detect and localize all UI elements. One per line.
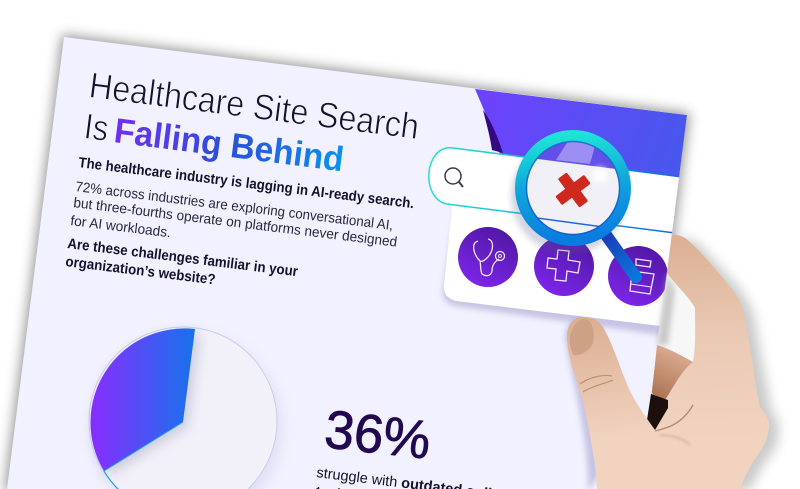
palm crease bbox=[655, 405, 693, 431]
title: Falling Behind bbox=[112, 111, 346, 179]
title bbox=[82, 64, 422, 179]
red X mark bbox=[554, 171, 592, 209]
dark fold bbox=[483, 110, 503, 153]
back finger bbox=[652, 345, 693, 401]
white gap behind fingers bbox=[657, 273, 697, 364]
magnifier shadow bbox=[511, 138, 627, 254]
magnifier ring bbox=[521, 136, 625, 240]
gap shadow bbox=[657, 273, 675, 345]
body text: but three-fourths operate on platforms never designed bbox=[73, 194, 398, 250]
icon: pill bottle bbox=[608, 246, 668, 306]
statistic: 36% bbox=[322, 399, 434, 471]
title: Healthcare Site Search bbox=[87, 64, 422, 147]
thumb shadow bbox=[565, 319, 638, 489]
purple header shape bbox=[475, 89, 687, 178]
page shadow bbox=[7, 37, 687, 489]
thumb bbox=[567, 317, 655, 489]
dark gap bbox=[647, 394, 668, 430]
magnifier handle bbox=[606, 235, 636, 277]
knuckle creases bbox=[580, 375, 613, 392]
hand shadow bbox=[679, 237, 779, 489]
hero illustration bbox=[429, 89, 690, 335]
hand bbox=[565, 235, 779, 489]
results panel bbox=[444, 200, 680, 326]
question: Are these challenges familiar in your bbox=[67, 236, 299, 280]
magnifying glass bbox=[511, 135, 640, 277]
subheading: The healthcare industry is lagging in AI-ready search. bbox=[78, 155, 415, 212]
body text: for AI workloads. bbox=[70, 212, 172, 240]
icon: search glass bbox=[445, 168, 463, 187]
palm and fingers bbox=[597, 235, 769, 489]
icon: stethoscope bbox=[458, 227, 518, 287]
lens bbox=[527, 142, 619, 234]
pie chart: 36% bbox=[89, 327, 283, 489]
body text: 72% across industries are exploring conversational AI, bbox=[75, 178, 394, 233]
thumbnail bbox=[570, 319, 594, 355]
icon: medical cross bbox=[534, 236, 594, 296]
title: Is bbox=[82, 105, 111, 149]
results panel shadow bbox=[440, 228, 671, 337]
page background bbox=[7, 37, 687, 489]
search bar bbox=[429, 148, 690, 234]
question: organization’s website? bbox=[65, 254, 216, 288]
